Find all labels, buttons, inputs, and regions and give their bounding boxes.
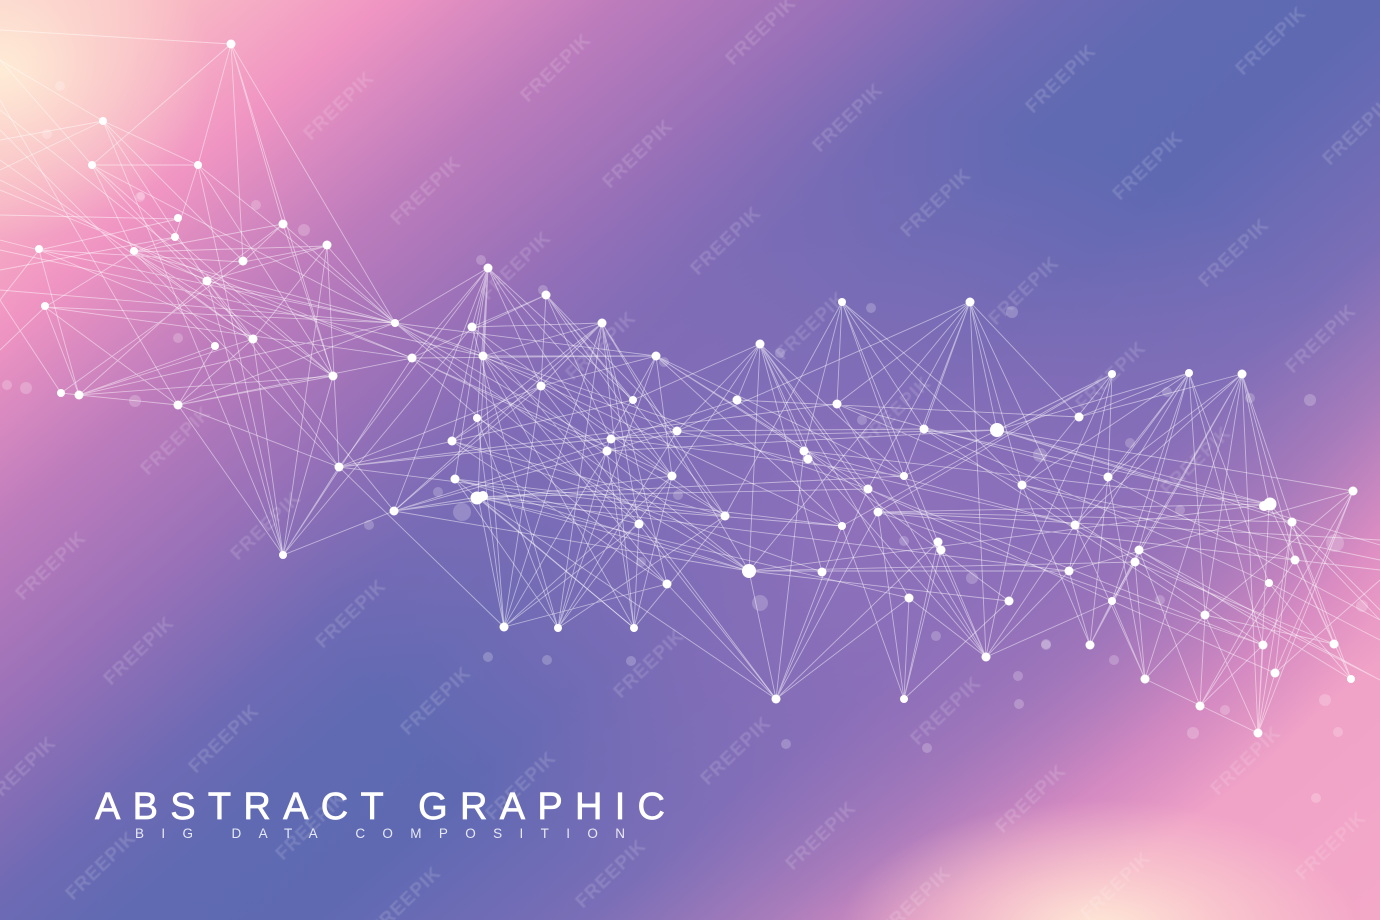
watermarks: FREEPIK	[1207, 722, 1286, 800]
watermarks: FREEPIK	[1282, 300, 1361, 378]
watermarks: FREEPIK	[517, 29, 596, 107]
watermarks: FREEPIK	[782, 797, 861, 875]
watermarks: FREEPIK	[477, 227, 556, 305]
watermarks: FREEPIK	[572, 835, 651, 913]
watermarks: FREEPIK	[897, 164, 976, 242]
watermarks: FREEPIK	[62, 827, 141, 905]
watermarks: FREEPIK	[992, 760, 1071, 838]
watermarks: FREEPIK	[985, 252, 1064, 330]
watermarks: FREEPIK	[227, 487, 306, 565]
watermarks: FREEPIK	[599, 115, 678, 193]
watermarks: FREEPIK	[482, 747, 561, 825]
watermarks: FREEPIK	[272, 787, 351, 865]
watermarks: FREEPIK	[312, 575, 391, 653]
network nodes	[35, 40, 1358, 738]
watermarks: FREEPIK	[610, 625, 689, 703]
watermarks: FREEPIK	[697, 712, 776, 790]
watermarks: FREEPIK	[137, 402, 216, 480]
watermarks: FREEPIK	[1292, 807, 1371, 885]
watermarks: FREEPIK	[397, 662, 476, 740]
watermarks: FREEPIK	[1022, 40, 1101, 118]
watermarks: FREEPIK	[12, 527, 91, 605]
network links	[0, 30, 1380, 733]
watermarks: FREEPIK	[809, 79, 888, 157]
subtitle: BIG DATA COMPOSITION	[135, 826, 625, 841]
watermarks: FREEPIK	[185, 700, 264, 778]
watermarks: FREEPIK	[562, 307, 641, 385]
watermarks: FREEPIK	[1109, 127, 1188, 205]
title: ABSTRACT GRAPHIC	[95, 786, 665, 828]
watermarks: FREEPIK	[387, 152, 466, 230]
watermarks: FREEPIK	[857, 372, 936, 450]
watermarks: FREEPIK	[300, 67, 379, 145]
watermarks: FREEPIK	[1157, 422, 1236, 500]
watermarks: FREEPIK	[1195, 214, 1274, 292]
watermarks: FREEPIK	[100, 612, 179, 690]
watermarks: FREEPIK	[1232, 2, 1311, 80]
watermarks: FREEPIK	[772, 287, 851, 365]
watermarks: FREEPIK	[907, 672, 986, 750]
watermarks: FREEPIK	[1072, 337, 1151, 415]
faint background nodes	[2, 81, 1368, 803]
watermarks: FREEPIK	[687, 202, 766, 280]
